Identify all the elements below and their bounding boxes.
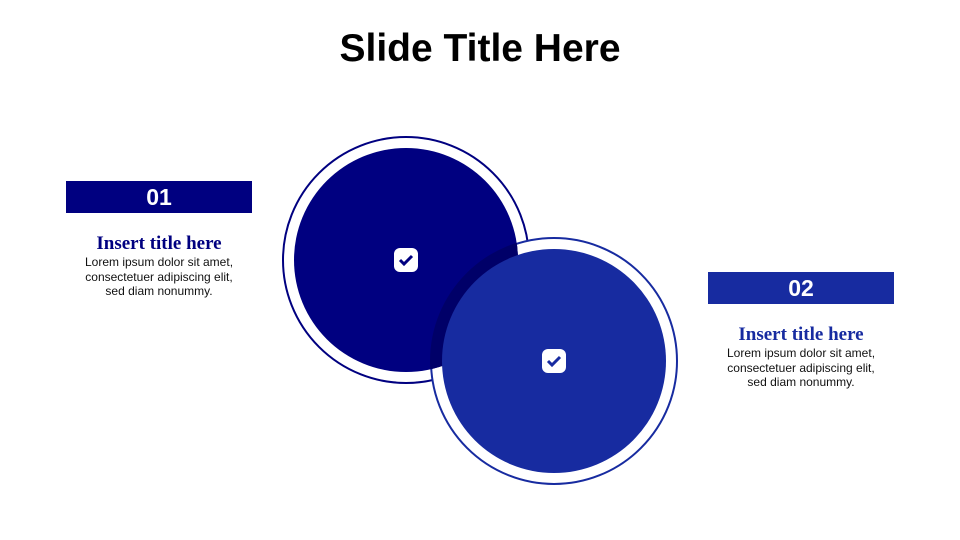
panel 01: [66, 181, 252, 298]
text 02: sed diam nonummy.: [747, 375, 855, 389]
heading 02: Insert title here: [738, 324, 864, 345]
text 02: Lorem ipsum dolor sit amet,: [727, 346, 875, 360]
text 01: [85, 255, 233, 298]
heading 01: Insert title here: [96, 233, 222, 254]
number badge 01: 01: [146, 184, 172, 210]
circle 1: [294, 148, 518, 372]
icon: check 2: [542, 349, 566, 373]
circles graphic: [282, 136, 678, 485]
icon: check 1: [394, 248, 418, 272]
text 01: consectetuer adipiscing elit,: [85, 270, 233, 284]
text 02: consectetuer adipiscing elit,: [727, 360, 875, 374]
panel 02: [708, 272, 894, 389]
number badge 02: [708, 272, 894, 304]
text 02: [727, 346, 875, 389]
circle 2: [442, 249, 666, 473]
number badge 01: [66, 181, 252, 213]
text 01: sed diam nonummy.: [105, 284, 213, 298]
title: Slide Title Here: [339, 27, 621, 70]
text 01: Lorem ipsum dolor sit amet,: [85, 255, 233, 269]
number badge 02: 02: [788, 275, 814, 301]
